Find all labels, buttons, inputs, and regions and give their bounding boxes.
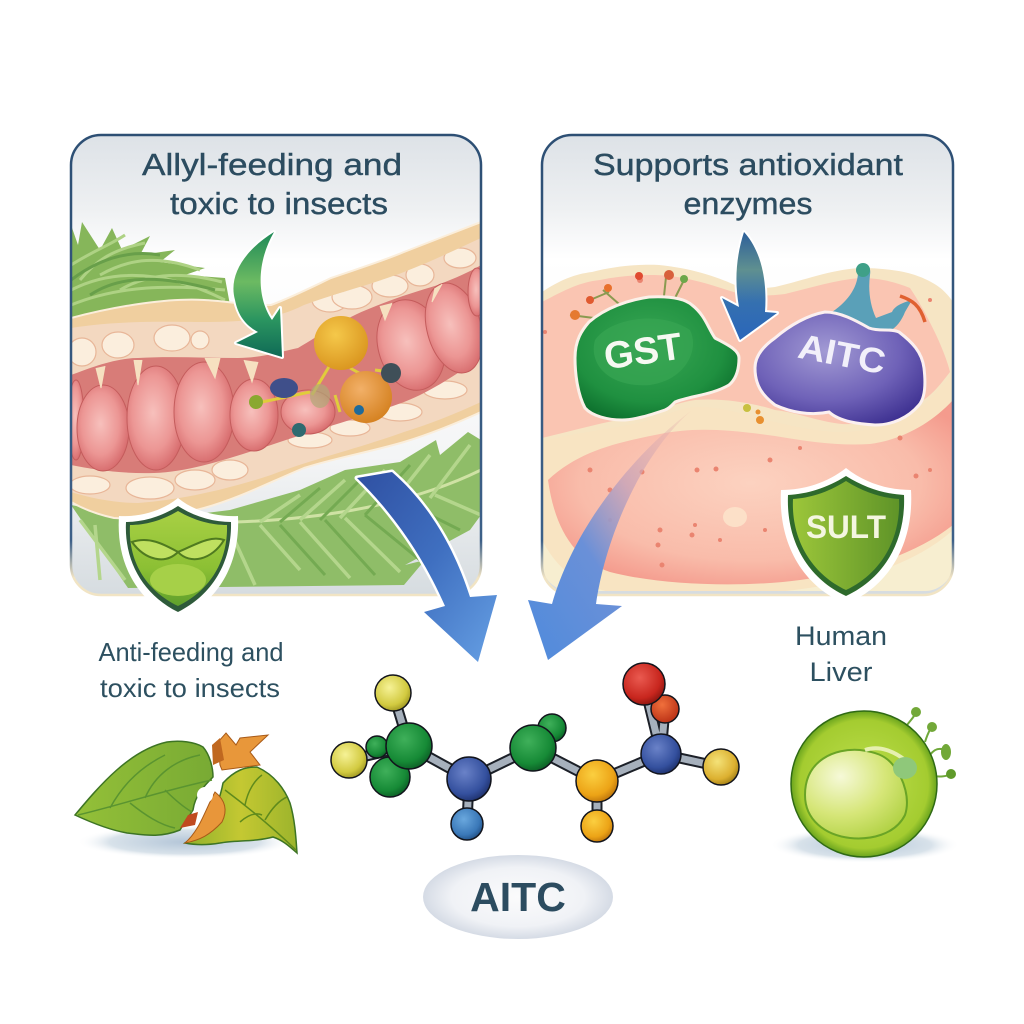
arrow: large left blue — [357, 472, 497, 662]
specks — [543, 277, 932, 568]
label: SULT: SULT — [806, 509, 886, 545]
gut band interior — [68, 238, 492, 503]
villi — [68, 268, 492, 471]
text: toxic to insects — [100, 673, 280, 703]
icon: shield left — [119, 498, 238, 620]
heading: right panel: Supports antioxidant — [593, 147, 903, 182]
icon: damaged leaf — [75, 733, 297, 859]
text: enzymes — [684, 186, 812, 221]
tissue red backing — [71, 265, 481, 473]
arrow: large right blue — [528, 410, 692, 660]
icon: AITC enzyme — [755, 263, 925, 425]
icon: insect enzyme cluster — [249, 316, 401, 437]
label pill: AITC: AITC — [470, 874, 566, 920]
leaf top left — [71, 222, 230, 322]
label pill: AITC — [423, 855, 613, 939]
label: AITC: AITC — [795, 327, 889, 382]
lower liver tissue — [543, 401, 952, 591]
panel: human liver tissue — [542, 135, 953, 600]
icon: GST enzyme — [570, 270, 739, 420]
panel border right — [542, 135, 953, 595]
gut band wall — [71, 222, 481, 519]
text: toxic to insects — [170, 186, 388, 221]
leaf bottom right — [71, 432, 481, 588]
arrow: small blue — [722, 232, 777, 340]
panel: insect gut — [68, 135, 492, 595]
text: Liver — [810, 657, 872, 687]
cream cell blobs — [68, 248, 476, 499]
arrow: green — [233, 232, 282, 357]
molecule: AITC — [331, 663, 739, 842]
caption: human liver: Human — [795, 621, 887, 651]
panel border left — [71, 135, 481, 595]
caption: anti-feeding: Anti-feeding and — [98, 637, 284, 667]
icon: SULT shield — [781, 468, 911, 604]
icon: green cell — [770, 707, 960, 863]
label: GST: GST — [601, 326, 685, 378]
upper liver tissue — [543, 264, 952, 442]
heading: left panel: Allyl-feeding and — [142, 147, 402, 182]
